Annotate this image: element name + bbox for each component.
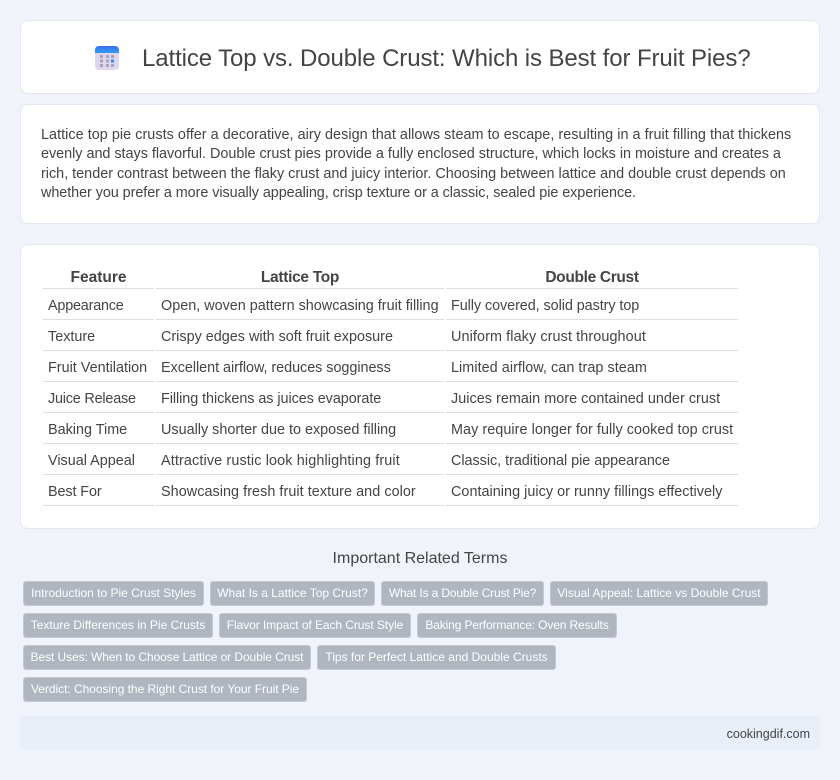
header: Feature: Feature: [70, 269, 126, 286]
related terms tags: What Is a Lattice Top Crust?: [217, 586, 368, 600]
intro text: [41, 127, 791, 201]
row: Juice Release: Juice Release: [48, 391, 136, 407]
row: Best For: [48, 484, 722, 500]
row: Visual Appeal: [48, 453, 670, 469]
row: Best For: Showcasing fresh fruit texture and color: [161, 484, 416, 500]
row: Texture: [48, 329, 646, 345]
related terms tags: Best Uses: When to Choose Lattice or Double Crust: [31, 650, 303, 664]
row: Visual Appeal: Classic, traditional pie appearance: [451, 453, 670, 469]
header panel: [20, 20, 820, 94]
related terms tags: Visual Appeal: Lattice vs Double Crust: [557, 586, 761, 600]
related terms tags: Introduction to Pie Crust Styles: [31, 586, 196, 600]
intro text: whether you prefer a more visually appealing, crisp texture or a classic, sealed pie experience.: [41, 185, 636, 201]
row: Fruit Ventilation: Excellent airflow, reduces sogginess: [161, 360, 391, 376]
related terms tags: What Is a Double Crust Pie?: [389, 586, 536, 600]
intro text: evenly and stays flavorful. Double crust pies provide a fully enclosed structure, which locks in moisture and creates a: [41, 146, 781, 162]
related terms tags: Verdict: Choosing the Right Crust for Your Fruit Pie: [31, 682, 299, 696]
comparison table: [43, 269, 738, 506]
related terms tags: Texture Differences in Pie Crusts: [31, 618, 205, 632]
footer source: cookingdif.com: [727, 727, 810, 741]
footer bar: [20, 716, 820, 750]
row: Texture: Uniform flaky crust throughout: [451, 329, 646, 345]
intro text: rich, tender contrast between the flaky crust and juicy interior. Choosing between lattice and double crust depends on: [41, 166, 786, 182]
icon: calendar: [95, 46, 119, 70]
related terms tags: Tips for Perfect Lattice and Double Crusts: [325, 650, 548, 664]
related terms tags: [23, 581, 768, 702]
intro text: Lattice top pie crusts offer a decorative, airy design that allows steam to escape, resulting in a fruit filling that thickens: [41, 127, 791, 143]
intro panel: [20, 104, 820, 224]
table panel: [20, 244, 820, 529]
row: Juice Release: [48, 391, 720, 407]
row: Visual Appeal: Attractive rustic look highlighting fruit: [161, 453, 400, 469]
row: Visual Appeal: Visual Appeal: [48, 453, 135, 469]
row: Fruit Ventilation: Limited airflow, can trap steam: [451, 360, 647, 376]
related terms tags: Flavor Impact of Each Crust Style: [227, 618, 403, 632]
row: Best For: Containing juicy or runny fillings effectively: [451, 484, 722, 500]
related terms heading: Important Related Terms: [333, 550, 507, 567]
row: Baking Time: Usually shorter due to exposed filling: [161, 422, 396, 438]
row: Fruit Ventilation: Fruit Ventilation: [48, 360, 147, 376]
row: Fruit Ventilation: [48, 360, 647, 376]
row: Juice Release: Juices remain more contained under crust: [451, 391, 720, 407]
header: Lattice Top: Lattice Top: [261, 269, 339, 286]
row: Texture: Texture: [48, 329, 95, 345]
row: Baking Time: [48, 422, 734, 438]
row: Baking Time: Baking Time: [48, 422, 127, 438]
row: Appearance: Open, woven pattern showcasing fruit filling: [161, 298, 439, 314]
row: Appearance: Fully covered, solid pastry top: [451, 298, 639, 314]
header: Double Crust: Double Crust: [545, 269, 639, 286]
row: Best For: Best For: [48, 484, 102, 500]
row: Texture: Crispy edges with soft fruit exposure: [161, 329, 393, 345]
title: Lattice Top vs. Double Crust: Which is Best for Fruit Pies?: [142, 45, 751, 72]
related terms tags: Baking Performance: Oven Results: [425, 618, 609, 632]
row: Juice Release: Filling thickens as juices evaporate: [161, 391, 381, 407]
row: Appearance: [48, 298, 639, 314]
row: Baking Time: May require longer for fully cooked top crust: [451, 422, 733, 438]
row: Appearance: Appearance: [48, 298, 124, 314]
